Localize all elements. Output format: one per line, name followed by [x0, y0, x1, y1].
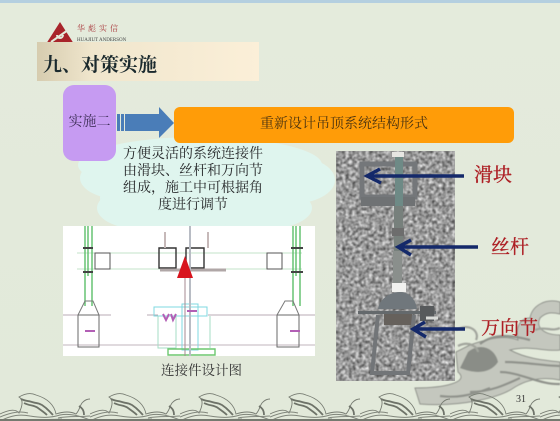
label: 万向节: 万向节 [481, 318, 538, 339]
universal joint [378, 292, 417, 309]
drawing caption: 连接件设计图 [161, 363, 242, 378]
cloud text: 方便灵活的系统连接件 [123, 147, 263, 162]
logo chinese name: 华彪实信 [77, 24, 121, 33]
arrow [117, 107, 174, 138]
arrow: slider [367, 169, 464, 183]
orange heading bar [174, 107, 514, 143]
icon: logo triangle [47, 22, 73, 42]
arrow: joint [413, 322, 465, 337]
orange heading bar: 重新设计吊顶系统结构形式 [260, 117, 428, 132]
label: 滑块: 滑块 [474, 165, 512, 186]
slider [362, 164, 415, 197]
cloud text: 由滑块、丝杆和万向节 [123, 164, 263, 179]
cloud text [123, 146, 263, 213]
top blue strip [0, 0, 560, 3]
cloud text: 度进行调节 [158, 198, 228, 213]
title bar [37, 42, 259, 81]
logo [47, 22, 126, 42]
design drawing [63, 226, 315, 356]
photo: granite background with connector [336, 151, 455, 381]
screw rod [395, 157, 403, 206]
title: 九、对策实施 [43, 50, 157, 77]
label: 丝杆: 丝杆 [491, 237, 529, 258]
page number: 31 [516, 394, 526, 405]
box: 实施二 [63, 85, 116, 161]
cloud text: 组成，施工中可根据角 [123, 181, 263, 196]
wave strip [0, 390, 560, 421]
arrow: screw rod [398, 240, 478, 255]
logo english name: HUAJIUT ANDERSON [77, 38, 126, 42]
box: 实施二: 实施二 [68, 115, 110, 130]
